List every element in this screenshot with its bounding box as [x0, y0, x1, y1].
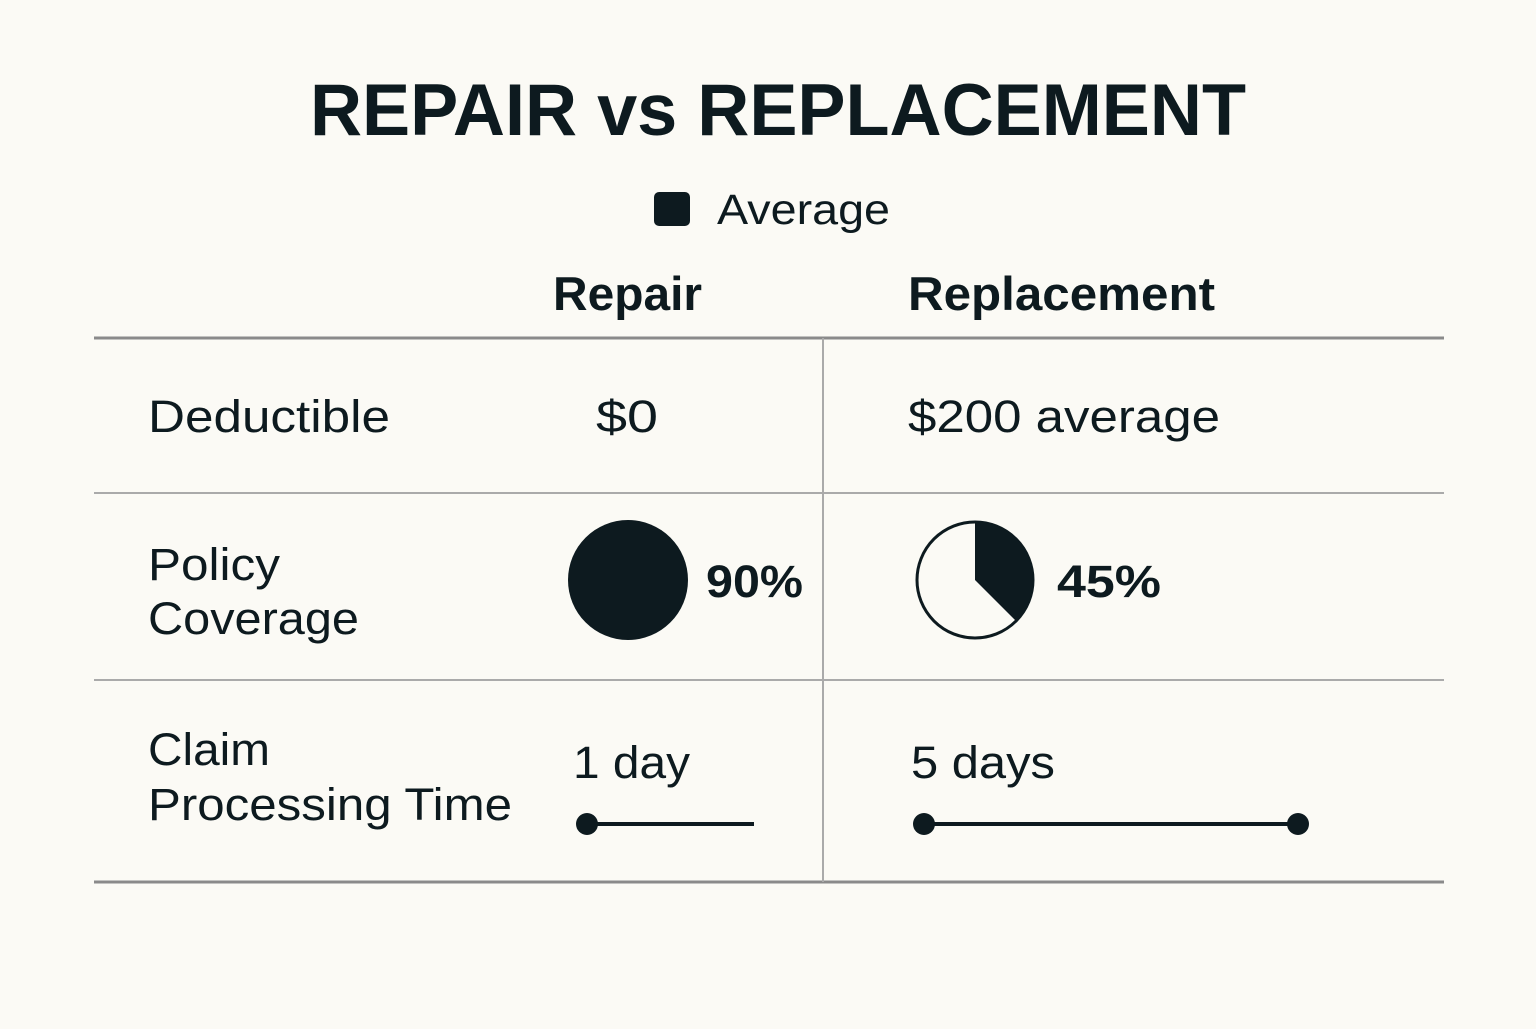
- title: REPAIR vs REPLACEMENT: [310, 70, 1246, 151]
- row: claim processing time: 1 day: [573, 737, 691, 788]
- column header: replacement: Replacement: [908, 267, 1215, 320]
- legend: Average: [717, 186, 890, 234]
- row: claim processing time: Processing Time: [148, 779, 512, 830]
- row: policy coverage: Policy: [148, 539, 281, 590]
- row: claim processing time: [148, 724, 1309, 835]
- row: policy coverage: 90%: [706, 556, 803, 607]
- row: policy coverage: 45%: [1057, 556, 1161, 607]
- row: deductible: Deductible: [148, 391, 390, 442]
- timeline: repair: [576, 813, 754, 835]
- row: deductible: [148, 391, 1220, 442]
- row: deductible: $200 average: [908, 391, 1220, 442]
- row: claim processing time: Claim: [148, 724, 270, 775]
- pie: replacement 45%: [917, 522, 1033, 638]
- row: policy coverage: [148, 520, 1161, 644]
- row: deductible: $0: [596, 391, 658, 442]
- timeline: replacement: [913, 813, 1309, 835]
- row: policy coverage: Coverage: [148, 593, 359, 644]
- column header: repair: Repair: [553, 267, 702, 320]
- legend: [654, 186, 890, 234]
- pie: repair 90%: [568, 520, 688, 640]
- row: claim processing time: 5 days: [911, 737, 1055, 788]
